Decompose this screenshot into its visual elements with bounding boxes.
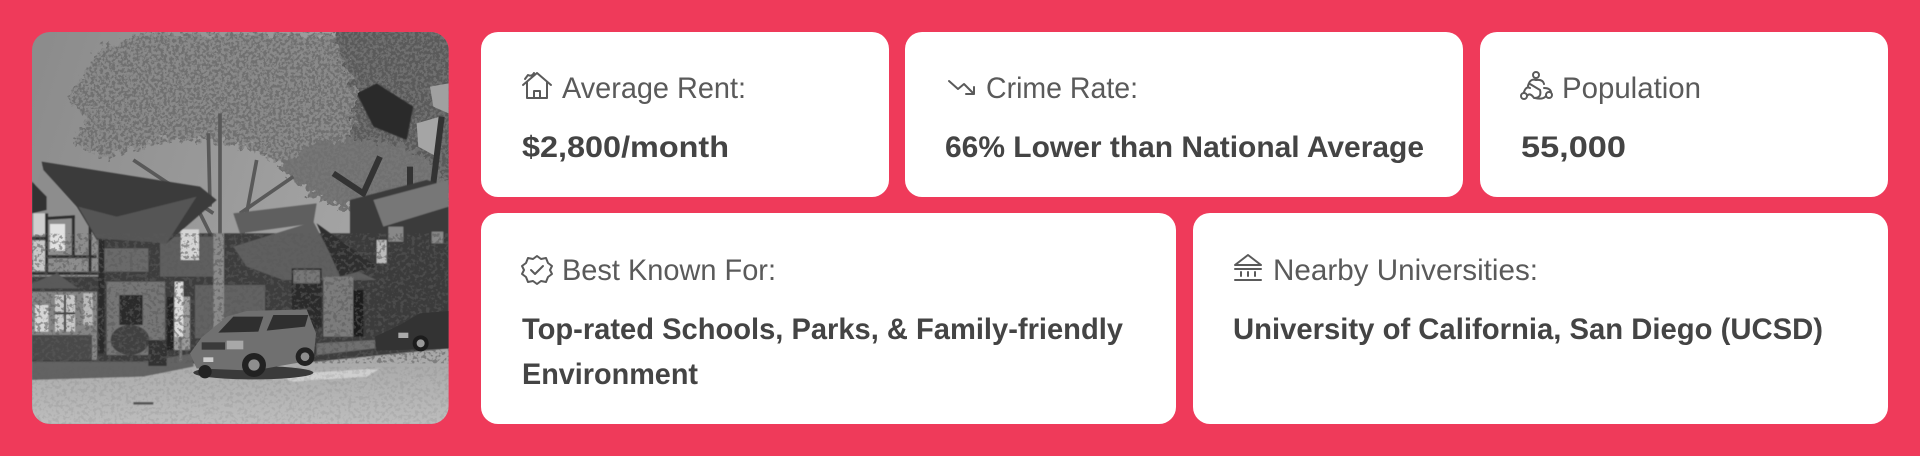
value: population: 55,000 (1521, 131, 1626, 164)
label: crime rate: Crime Rate: (986, 72, 1138, 105)
label: population: Population (1562, 72, 1701, 105)
panel: average rent (481, 32, 889, 197)
icon: trending down arrow (949, 81, 974, 94)
icon: house (523, 73, 551, 98)
panel: nearby universities (1193, 213, 1888, 424)
icon: SUV (190, 309, 316, 379)
label: nearby universities: Nearby Universities: (1273, 254, 1538, 287)
panel: crime rate (905, 32, 1463, 197)
label: average rent: Average Rent: (562, 72, 746, 105)
icon: verified badge (522, 256, 552, 284)
panel: best known for (481, 213, 1176, 424)
value: nearby universities: University of California, San Diego (UCSD) (1233, 313, 1823, 346)
icon: population group (1521, 72, 1552, 99)
label: best known for: Best Known For: (562, 254, 776, 287)
value: best known for: Top-rated Schools, Parks, & Family-friendly (522, 313, 1123, 346)
photo: tudor-style building with trees and parked cars (32, 23, 460, 424)
panel: population (1480, 32, 1888, 197)
value: rent: $2,800/month (522, 131, 729, 164)
value: crime rate: 66% Lower than National Average (945, 131, 1424, 164)
value: best known for (522, 313, 1123, 391)
icon: dark sedan (375, 311, 449, 351)
icon: university building (1235, 255, 1261, 280)
value: best known for: Environment (522, 358, 698, 391)
